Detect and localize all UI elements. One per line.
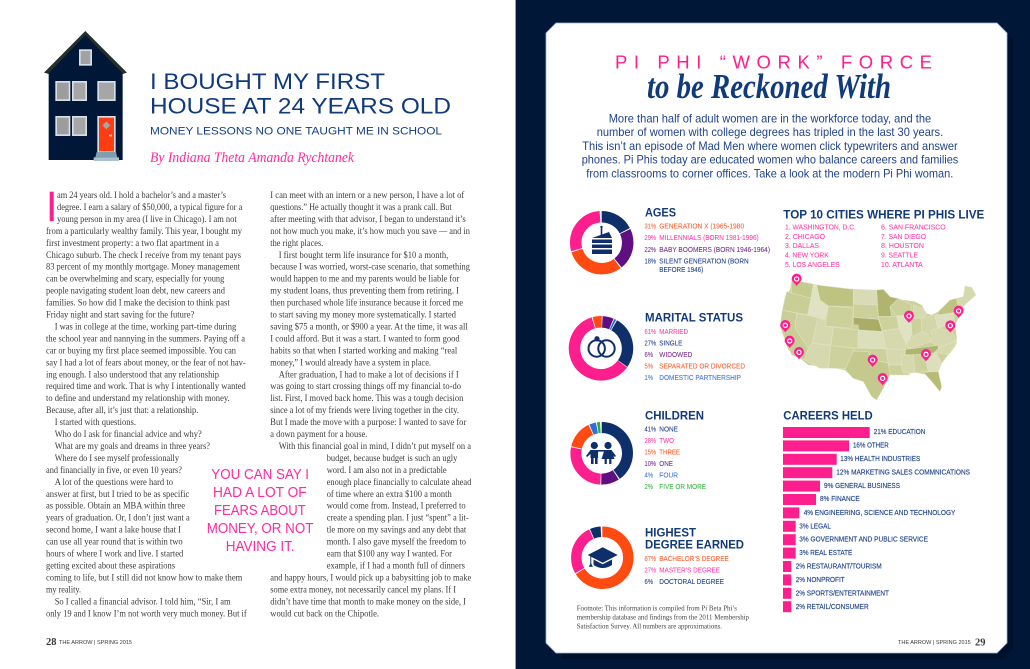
footnote: Satisfaction Survey. All numbers are approximations. bbox=[577, 622, 722, 630]
text block: column one: first investment property: a two flat apartment in a bbox=[46, 238, 220, 249]
text block: column two: I can meet with an intern or a new person, I have a lot of bbox=[270, 190, 465, 201]
text block: column one: as possible. Obtain an MBA within three bbox=[46, 501, 185, 512]
text block: column two: to start saving my money more systematically. I started bbox=[270, 310, 456, 320]
page footer: left bbox=[46, 637, 132, 648]
heading and list: top cities: TOP 10 CITIES WHERE PI PHIS LIVE bbox=[783, 207, 984, 221]
chart: careers held bars: 2% RETAIL/CONSUMER bbox=[796, 602, 869, 611]
text block: column one bbox=[46, 190, 247, 619]
text block: column one: What are my goals and dreams in three years? bbox=[55, 441, 210, 452]
legend: ages: 31% bbox=[644, 222, 656, 230]
subtitle: MONEY LESSONS NO ONE TAUGHT ME IN SCHOOL bbox=[150, 126, 442, 138]
legend: ages bbox=[644, 206, 770, 274]
legend: highest degree: MASTER’S DEGREE bbox=[659, 566, 720, 574]
legend: highest degree bbox=[644, 526, 744, 586]
heading and list: top cities: 8. HOUSTON bbox=[881, 241, 924, 250]
icon: graduation cap bbox=[588, 547, 618, 568]
chart: careers held bars: 21% EDUCATION bbox=[874, 427, 925, 436]
icon: map pins bbox=[780, 274, 964, 385]
legend: children: 2% bbox=[644, 482, 653, 491]
text block: column one: am 24 years old. I hold a bachelor’s and a master’s bbox=[57, 190, 226, 201]
text block: column one: second home, I want a lake house that I bbox=[46, 525, 181, 536]
text block: column one: coming to life, but I still did not know how to make them bbox=[46, 572, 243, 583]
footnote: Footnote: This information is compiled from Pi Beta Phi’s bbox=[577, 605, 737, 613]
heading: to be Reckoned With: to be Reckoned With bbox=[647, 67, 891, 106]
pull quote: HAD A LOT OF bbox=[213, 485, 307, 501]
text block: column two: since a lot of my friends were living together in the city. bbox=[270, 405, 459, 416]
text block: column two: example, if I had a month full of dinners bbox=[327, 560, 465, 571]
text block: column two: But I made the move with a purpose: I wanted to save for bbox=[270, 417, 467, 428]
text block: column one: the school year and nannying in the summers. Paying off a bbox=[46, 333, 246, 344]
legend: marital status: 1% bbox=[644, 373, 653, 382]
legend: highest degree: DEGREE EARNED bbox=[645, 538, 744, 552]
pull quote bbox=[207, 467, 314, 555]
text block: column two: some extra money, not necessarily cancel my plans. If I bbox=[270, 584, 456, 595]
panel: left article page bbox=[0, 0, 516, 669]
chart: US map with city pins bbox=[780, 274, 976, 400]
legend: ages: MILLENNIALS (BORN 1981-1996) bbox=[659, 233, 759, 242]
chart: marital status donut bbox=[569, 316, 633, 381]
text block: column two: earn that $100 any way I wanted. For bbox=[327, 548, 453, 560]
heading and list: top cities: 2. CHICAGO bbox=[785, 232, 825, 241]
pull quote: YOU CAN SAY I bbox=[211, 467, 309, 483]
chart: ages donut bbox=[576, 217, 628, 269]
legend: children: 4% bbox=[644, 470, 653, 480]
title: HOUSE AT 24 YEARS OLD bbox=[150, 94, 451, 119]
page footer: right: THE ARROW | SPRING 2015 bbox=[898, 640, 971, 646]
icon: navy house bbox=[44, 31, 127, 161]
footnote: membership database and findings from the 2011 Membership bbox=[577, 614, 749, 622]
text block: column one: only 19 and I know I’m not worth very much money. But if bbox=[46, 608, 247, 619]
legend: highest degree: 27% bbox=[644, 566, 656, 574]
legend: ages: GENERATION X (1965-1980 bbox=[659, 222, 744, 230]
text block: column two: then purchased whole life insurance because it forced me bbox=[270, 298, 463, 309]
legend: marital status: MARRIED bbox=[659, 327, 688, 336]
byline: By Indiana Theta Amanda Rychtanek bbox=[150, 150, 354, 166]
text block: column two: a down payment for a house. bbox=[270, 429, 367, 440]
chart: careers held bars: 9% GENERAL BUSINESS bbox=[824, 481, 900, 490]
drop cap bbox=[50, 192, 54, 221]
page footer: right bbox=[898, 637, 986, 648]
text block: column two: and happy hours, I would pick up a babysitting job to make bbox=[270, 572, 471, 583]
legend: children: FIVE OR MORE bbox=[659, 482, 706, 491]
text block: column one: from a particularly wealthy family. This year, I bought my bbox=[46, 226, 242, 237]
heading and list: top cities: 6. SAN FRANCISCO bbox=[881, 222, 946, 232]
legend: ages: AGES bbox=[645, 206, 676, 220]
chart: careers held bars: 16% OTHER bbox=[853, 440, 889, 449]
chart: careers held bars: 8% FINANCE bbox=[820, 494, 860, 503]
icon: cake bbox=[592, 226, 612, 254]
text block: column two: not how much you make, it’s how much you save — and in bbox=[270, 226, 470, 237]
chart: highest degree donut bbox=[576, 532, 628, 584]
text block: column one: and financially in five, or even 10 years? bbox=[46, 465, 182, 476]
legend: marital status: WIDOWED bbox=[659, 350, 692, 359]
text block: column one: I started with questions. bbox=[55, 417, 136, 428]
text block: column one: answer at first, but I tried to be as specific bbox=[46, 489, 189, 500]
text block: column one: families. So how did I make the decision to think past bbox=[46, 298, 230, 309]
text block: column one: I was in college at the time, working part-time during bbox=[55, 321, 236, 332]
heading and list: top cities: 7. SAN DIEGO bbox=[881, 232, 926, 241]
intro paragraph: from classrooms to corner offices. Take a look at the modern Pi Phi woman. bbox=[586, 166, 953, 180]
chart: careers held bars: 12% MARKETING SALES COMMNICATIONS bbox=[836, 467, 970, 476]
text block: column one: car or buying my first place seemed impossible. You can bbox=[46, 345, 236, 356]
legend: children: 28% bbox=[644, 436, 656, 445]
intro paragraph: This isn’t an episode of Mad Men where women click typewriters and answer bbox=[582, 139, 958, 153]
legend: ages: 29% bbox=[644, 233, 656, 242]
chart: careers held bars: 3% LEGAL bbox=[799, 522, 831, 530]
text block: column two bbox=[270, 190, 472, 619]
heading and list: top cities: 1. WASHINGTON, D.C. bbox=[785, 222, 856, 232]
page footer: left: 28 bbox=[46, 637, 56, 648]
legend: highest degree: 67% bbox=[644, 554, 656, 563]
chart: children donut bbox=[576, 428, 628, 479]
text block: column one: Because, after all, it’s just that: a relationship. bbox=[46, 405, 198, 416]
icon: wedding rings bbox=[588, 337, 615, 357]
chart: careers held bars: 2% SPORTS/ENTERTAINMENT bbox=[796, 588, 889, 598]
legend: children: NONE bbox=[659, 424, 678, 434]
pull quote: FEARS ABOUT bbox=[214, 503, 306, 519]
legend: marital status: 61% bbox=[644, 327, 656, 336]
text block: column one: hours of where I work and live. I started bbox=[46, 548, 183, 560]
text block: column two: didn’t have time that month to make money on the side, I bbox=[270, 596, 466, 607]
chart: careers held bars: 13% HEALTH INDUSTRIES bbox=[840, 454, 920, 463]
text block: column one: 83 percent of my monthly mortgage. Money management bbox=[46, 262, 240, 273]
text block: column two: word. I am also not in a predictable bbox=[327, 465, 447, 476]
chart: careers held bars: 4% ENGINEERING, SCIENCE AND TECHNOLOGY bbox=[804, 508, 956, 517]
text block: column two: was going to start crossing things off my financial to-do bbox=[270, 381, 461, 392]
legend: children bbox=[644, 408, 706, 491]
legend: children: CHILDREN bbox=[645, 408, 704, 422]
legend: ages: SILENT GENERATION (BORN bbox=[659, 256, 749, 266]
text block: column one: can be overwhelming and scary, especially for young bbox=[46, 274, 224, 285]
text block: column two: I first bought term life insurance for $10 a month, bbox=[279, 250, 448, 261]
text block: column one: required time and work. That is why I intentionally wanted bbox=[46, 381, 246, 392]
text block: column one: can use all year round that is within two bbox=[46, 537, 183, 548]
heading and list: top cities: 5. LOS ANGELES bbox=[785, 260, 840, 269]
legend: marital status: SINGLE bbox=[659, 338, 682, 348]
chart: careers held bars: 3% GOVERNMENT AND PUBLIC SERVICE bbox=[799, 534, 928, 544]
pull quote: MONEY, OR NOT bbox=[207, 521, 314, 537]
text block: column one: young person in my area (I live in Chicago). I am not bbox=[57, 214, 237, 225]
text block: column one: ing enough. I also understood that any relationship bbox=[46, 369, 219, 380]
text block: column one: Chicago suburb. The check I receive from my tenant pays bbox=[46, 250, 241, 261]
legend: marital status: 6% bbox=[644, 350, 653, 359]
icon: two children bbox=[586, 442, 616, 464]
text block: column two: enough place financially to calculate ahead bbox=[327, 477, 471, 488]
page footer: left: THE ARROW | SPRING 2015 bbox=[59, 640, 132, 646]
footnote bbox=[577, 605, 749, 630]
chart: careers held bars: 2% NONPROFIT bbox=[796, 575, 845, 584]
text block: column one: So I called a financial advisor. I told him, “Sir, I am bbox=[55, 596, 231, 607]
text block: column two: I could afford. But it was a start. I wanted to form good bbox=[270, 333, 460, 344]
legend: children: 10% bbox=[644, 459, 656, 468]
text block: column one: my reality. bbox=[46, 584, 81, 595]
chart: careers held bars: 3% REAL ESTATE bbox=[799, 548, 852, 557]
legend: ages: 18% bbox=[644, 256, 656, 266]
text block: column one: Who do I ask for financial advice and why? bbox=[55, 429, 202, 440]
legend: children: 41% bbox=[644, 424, 656, 434]
text block: column one: degree. I earn a salary of $50,000, a typical figure for a bbox=[57, 202, 243, 213]
legend: marital status: MARITAL STATUS bbox=[645, 311, 743, 325]
legend: highest degree: HIGHEST bbox=[645, 526, 697, 540]
text block: column two: because I was worried, worst-case scenario, that something bbox=[270, 262, 470, 273]
legend: highest degree: DOCTORAL DEGREE bbox=[659, 577, 724, 586]
heading and list: top cities: 10. ATLANTA bbox=[881, 260, 923, 269]
white card bbox=[546, 23, 1007, 653]
legend: marital status: 5% bbox=[644, 362, 653, 370]
legend: marital status bbox=[644, 311, 745, 382]
chart: careers held bars bbox=[783, 408, 970, 612]
text block: column two: create a spending plan. I just “spent” a lit- bbox=[327, 513, 469, 524]
text block: column two: saving $75 a month, or $900 a year. At the time, it was all bbox=[270, 321, 468, 332]
legend: marital status: 27% bbox=[644, 338, 656, 348]
text block: column one: Friday night and start saving for the future? bbox=[46, 310, 194, 320]
intro paragraph: More than half of adult women are in the workforce today, and the bbox=[609, 112, 931, 126]
text block: column two: would come from. Instead, I preferred to bbox=[327, 501, 466, 512]
legend: ages: BABY BOOMERS (BORN 1946-1964) bbox=[659, 245, 770, 254]
text block: column two: would cut back on the Chipotle. bbox=[270, 608, 379, 619]
heading and list: top cities bbox=[783, 207, 984, 269]
legend: ages: BEFORE 1946) bbox=[659, 265, 703, 274]
text block: column two: budget, because budget is such an ugly bbox=[327, 453, 457, 464]
heading and list: top cities: 4. NEW YORK bbox=[785, 250, 829, 260]
chart: careers held bars: CAREERS HELD bbox=[783, 408, 873, 422]
text block: column one: to define and understand my relationship with money. bbox=[46, 393, 230, 404]
intro paragraph bbox=[582, 112, 958, 180]
text block: column one: years of graduation. Or, I don’t just want a bbox=[46, 513, 190, 524]
text block: column one: people navigating student loan debt, new careers and bbox=[46, 286, 225, 297]
title bbox=[150, 69, 451, 119]
text block: column two: the right places. bbox=[270, 238, 323, 249]
legend: highest degree: BACHELOR’S DEGREE bbox=[659, 554, 729, 563]
text block: column two: questions.” He actually thought it was a prank call. But bbox=[270, 202, 452, 213]
text block: column two: after meeting with that advisor, I began to understand it’s bbox=[270, 214, 466, 225]
legend: highest degree: 6% bbox=[644, 577, 653, 586]
legend: marital status: DOMESTIC PARTNERSHIP bbox=[659, 373, 741, 382]
panel: right navy page bbox=[515, 0, 1030, 669]
heading and list: top cities: 9. SEATTLE bbox=[881, 250, 918, 260]
chart: careers held bars: 2% RESTAURANT/TOURISM bbox=[796, 562, 882, 570]
text block: column two: my student loans, thus preventing them from retiring. I bbox=[270, 286, 459, 297]
intro paragraph: phones. Pi Phis today are educated women who balance careers and families bbox=[582, 153, 958, 167]
heading: Pi Phi work force: PI PHI “WORK” FORCE bbox=[615, 51, 932, 72]
text block: column two: would happen to me and my parents would be liable for bbox=[270, 274, 460, 285]
text block: column two: money,” I would already have a system in place. bbox=[270, 357, 431, 368]
legend: children: TWO bbox=[659, 436, 674, 445]
title: I BOUGHT MY FIRST bbox=[150, 69, 385, 94]
legend: children: FOUR bbox=[659, 470, 678, 480]
text block: column two: list. First, I moved back home. This was a tough decision bbox=[270, 393, 463, 404]
text block: column two: habits so that when I started working and making “real bbox=[270, 345, 458, 356]
legend: children: 15% bbox=[644, 448, 656, 456]
text block: column two: month. I also gave myself the freedom to bbox=[327, 537, 466, 548]
pull quote: HAVING IT. bbox=[226, 539, 295, 555]
legend: ages: 22% bbox=[644, 245, 656, 254]
legend: marital status: SEPARATED OR DIVORCED bbox=[659, 362, 745, 370]
text block: column two: After graduation, I had to make a lot of decisions if I bbox=[279, 369, 459, 380]
text block: column two: of time where an extra $100 a month bbox=[327, 489, 452, 500]
text block: column two: With this financial goal in mind, I didn’t put myself on a bbox=[279, 441, 472, 452]
heading and list: top cities: 3. DALLAS bbox=[785, 241, 819, 250]
text block: column one: getting excited about these aspirations bbox=[46, 560, 175, 571]
page footer: right: 29 bbox=[975, 637, 986, 648]
text block: column one: say I had a lot of fears about money, or the fear of not hav- bbox=[46, 357, 246, 368]
text block: column one: A lot of the questions were hard to bbox=[55, 477, 173, 488]
legend: children: ONE bbox=[659, 459, 673, 468]
text block: column one: Where do I see myself professionally bbox=[55, 453, 179, 464]
legend: children: THREE bbox=[659, 448, 680, 456]
text block: column two: tle more on my savings and any debt that bbox=[327, 525, 467, 536]
intro paragraph: number of women with college degrees has tripled in the last 30 years. bbox=[597, 125, 943, 139]
